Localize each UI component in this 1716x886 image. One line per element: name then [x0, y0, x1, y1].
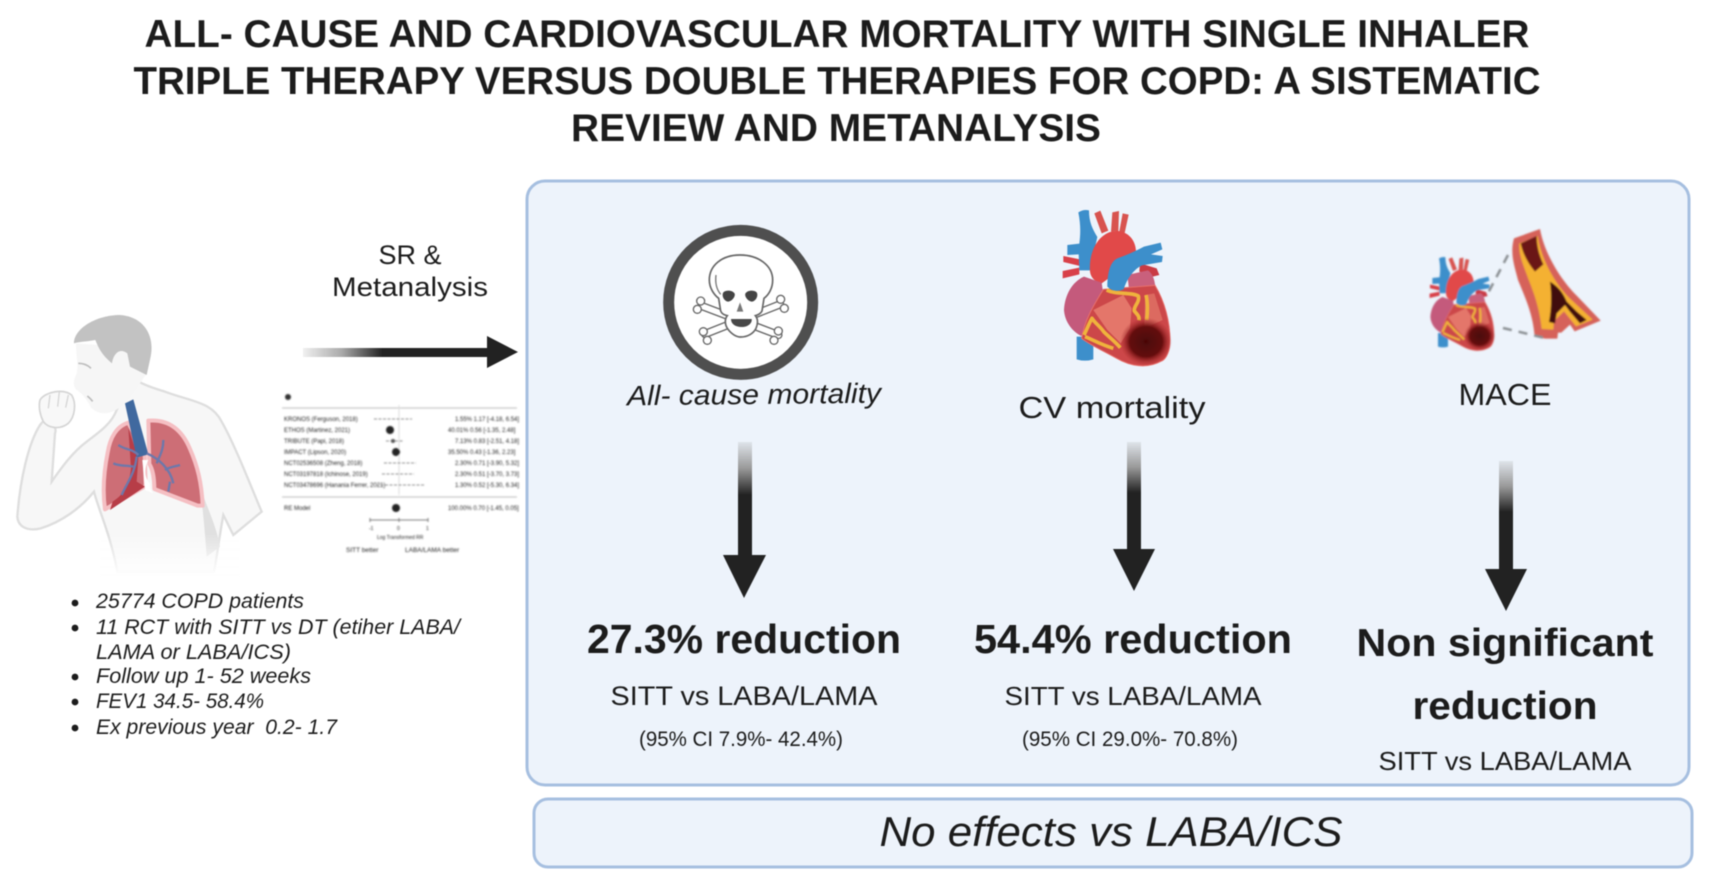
title: TRIPLE THERAPY VERSUS DOUBLE THERAPIES FOR COPD: A SISTEMATIC	[134, 60, 1540, 103]
patient characteristics list: 11 RCT with SITT vs DT (etiher LABA/	[96, 616, 462, 639]
forest plot: 2.30% 0.51 [-3.70, 3.73]	[455, 472, 519, 478]
label: SR and Metanalysis	[332, 240, 488, 302]
forest plot: 1	[426, 526, 429, 532]
forest plot: NCT02536508 (Zheng, 2018)	[284, 461, 362, 467]
patient characteristics list: FEV1 34.5- 58.4%	[96, 690, 264, 713]
icon: heart	[1063, 210, 1172, 366]
panel: outcomes	[527, 181, 1689, 785]
forest plot: ETHOS (Martinez, 2021)	[284, 428, 350, 434]
confidence interval: (95% CI 7.9%- 42.4%)	[639, 728, 843, 751]
forest plot: 1.55% 1.17 [-4.18, 6.54]	[455, 417, 519, 423]
forest plot: NCT03197818 (Ichinose, 2019)	[284, 472, 368, 478]
forest plot: TRIBUTE (Papi, 2018)	[284, 439, 344, 445]
patient characteristics list: LAMA or LABA/ICS)	[96, 641, 291, 664]
icon: skull and crossbones	[669, 230, 813, 374]
arrow: CV	[1113, 442, 1155, 591]
forest plot: KRONOS (Ferguson, 2018)	[284, 417, 358, 423]
column: MACE	[1356, 377, 1654, 776]
icon: small heart with artery	[1430, 229, 1601, 351]
icon: coughing man with lungs	[17, 315, 262, 577]
title: ALL- CAUSE AND CARDIOVASCULAR MORTALITY WITH SINGLE INHALER	[144, 13, 1530, 56]
column: CV mortality: CV mortality	[1018, 390, 1206, 425]
forest plot: 1.30% 0.52 [-5.30, 6.34]	[455, 483, 519, 489]
arrow: MACE	[1485, 461, 1527, 611]
forest plot: Log Transformed RR	[377, 535, 424, 541]
forest plot: NCT03478696 (Hanania Ferrer, 2021)	[284, 483, 385, 489]
label: SR and Metanalysis: Metanalysis	[332, 272, 488, 302]
panel: no effects: No effects vs LABA/ICS	[880, 808, 1342, 855]
forest plot	[282, 394, 519, 554]
icon: small heart	[1430, 257, 1495, 351]
title: REVIEW AND METANALYSIS	[571, 107, 1101, 150]
column: MACE: MACE	[1458, 377, 1552, 412]
patient characteristics list: 25774 COPD patients	[95, 590, 305, 613]
forest plot: LABA/LAMA better	[405, 547, 460, 554]
result: 54.4% reduction: 54.4% reduction	[974, 616, 1292, 662]
comparison: SITT vs LABA/LAMA	[610, 681, 878, 711]
comparison: SITT vs LABA/LAMA	[1004, 681, 1262, 711]
forest plot: 35.50% 0.43 [-1.36, 2.23]	[448, 450, 516, 456]
column: all-cause mortality	[587, 378, 901, 751]
arrow: to results	[303, 336, 518, 368]
forest plot: IMPACT (Lipson, 2020)	[284, 450, 346, 456]
result: non significant reduction: Non significant	[1356, 622, 1654, 665]
forest plot: SITT better	[346, 547, 379, 554]
confidence interval: (95% CI 29.0%- 70.8%)	[1022, 728, 1238, 751]
forest plot: RE Model	[284, 506, 310, 512]
forest plot: 2.30% 0.71 [-3.90, 5.32]	[455, 461, 519, 467]
panel: no effects	[534, 799, 1692, 867]
arrow: all-cause	[723, 442, 766, 598]
label: SR and Metanalysis: SR &	[378, 240, 442, 270]
forest plot: 7.13% 0.83 [-2.51, 4.18]	[455, 439, 519, 445]
title	[134, 13, 1540, 150]
comparison: SITT vs LABA/LAMA	[1378, 746, 1632, 776]
patient characteristics list	[72, 590, 462, 739]
patient characteristics list: Ex previous year 0.2- 1.7	[96, 716, 338, 739]
forest plot: 100.00% 0.70 [-1.45, 0.05]	[448, 506, 519, 512]
dashed zoom lines	[1487, 255, 1545, 338]
column: CV mortality	[974, 390, 1292, 751]
forest plot: 40.01% 0.56 [-1.35, 2.48]	[448, 428, 516, 434]
forest plot: 0	[397, 526, 400, 532]
patient characteristics list: Follow up 1- 52 weeks	[96, 665, 312, 688]
forest plot: -1	[369, 526, 374, 532]
result: non significant reduction: reduction	[1412, 685, 1598, 728]
column: all-cause mortality: All- cause mortality	[625, 378, 883, 411]
icon: atherosclerotic artery	[1512, 229, 1601, 339]
result: 27.3% reduction: 27.3% reduction	[587, 616, 901, 662]
result: non significant reduction	[1356, 622, 1654, 728]
